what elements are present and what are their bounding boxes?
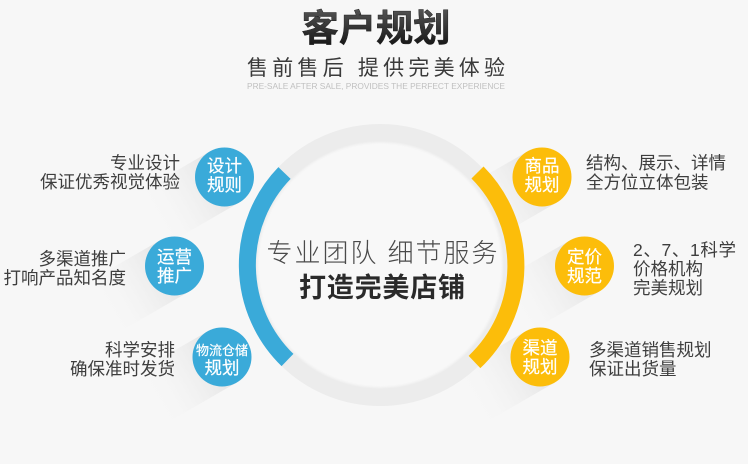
node: 设计规则 [195,148,254,206]
center text: 专业团队 细节服务 [266,238,498,268]
node: 物流仓储规划: 规划 [204,358,240,378]
node: 商品规划: 商品 [524,156,560,176]
text: 物流仓储 description: 科学安排 [105,340,175,360]
text: 定价规范 description [633,240,736,298]
text: 定价规范 description: 2、7、1科学 [633,240,736,260]
node: 定价规范: 规范 [567,266,602,286]
node: 渠道规划: 规划 [522,357,558,377]
text: 运营推广 description: 多渠道推广 [38,249,126,269]
ring inner disc [256,141,504,389]
center text [266,238,498,303]
text: 渠道规划 description: 保证出货量 [589,359,676,379]
ring blue arc [247,173,288,360]
title: 客户规划 [302,8,450,49]
node: 定价规范 [555,236,614,296]
ring grey track [248,132,512,398]
text: 定价规范 description: 完美规划 [633,278,703,298]
node: 商品规划: 规划 [524,175,560,195]
subtitle: 售前售后 提供完美体验 [247,57,505,80]
text: 设计规则 description: 专业设计 [110,153,180,173]
circle shadows [86,151,599,425]
node: 定价规范: 定价 [567,247,602,267]
node: 物流仓储规划 [192,328,252,386]
text: 渠道规划 description: 多渠道销售规划 [589,340,712,360]
center ring [247,132,516,398]
node: 渠道规划: 渠道 [522,338,558,358]
node: 渠道规划 [510,328,570,386]
node: 运营推广 [145,236,204,296]
text: 物流仓储 description: 确保准时发货 [70,359,175,379]
text: 设计规则 description: 保证优秀视觉体验 [40,172,180,192]
english subtitle: PRE-SALE AFTER SALE, PROVIDES THE PERFECT EXPERIENCE [247,81,505,91]
node: 运营推广: 推广 [157,266,192,286]
ring yellow arc [474,172,516,362]
node: 物流仓储规划: 物流仓储 [196,343,248,358]
node: 设计规则: 规则 [207,175,242,195]
node: 商品规划 [512,148,572,206]
text: 定价规范 description: 价格机构 [633,259,703,279]
text: 商品规划 description: 结构、展示、详情 [586,153,726,173]
node: 运营推广: 运营 [157,247,192,267]
center text: 打造完美店铺 [299,273,465,303]
text: 商品规划 description: 全方位立体包装 [586,172,708,192]
text: 运营推广 description: 打响产品知名度 [4,268,126,288]
node: 设计规则: 设计 [207,156,242,176]
